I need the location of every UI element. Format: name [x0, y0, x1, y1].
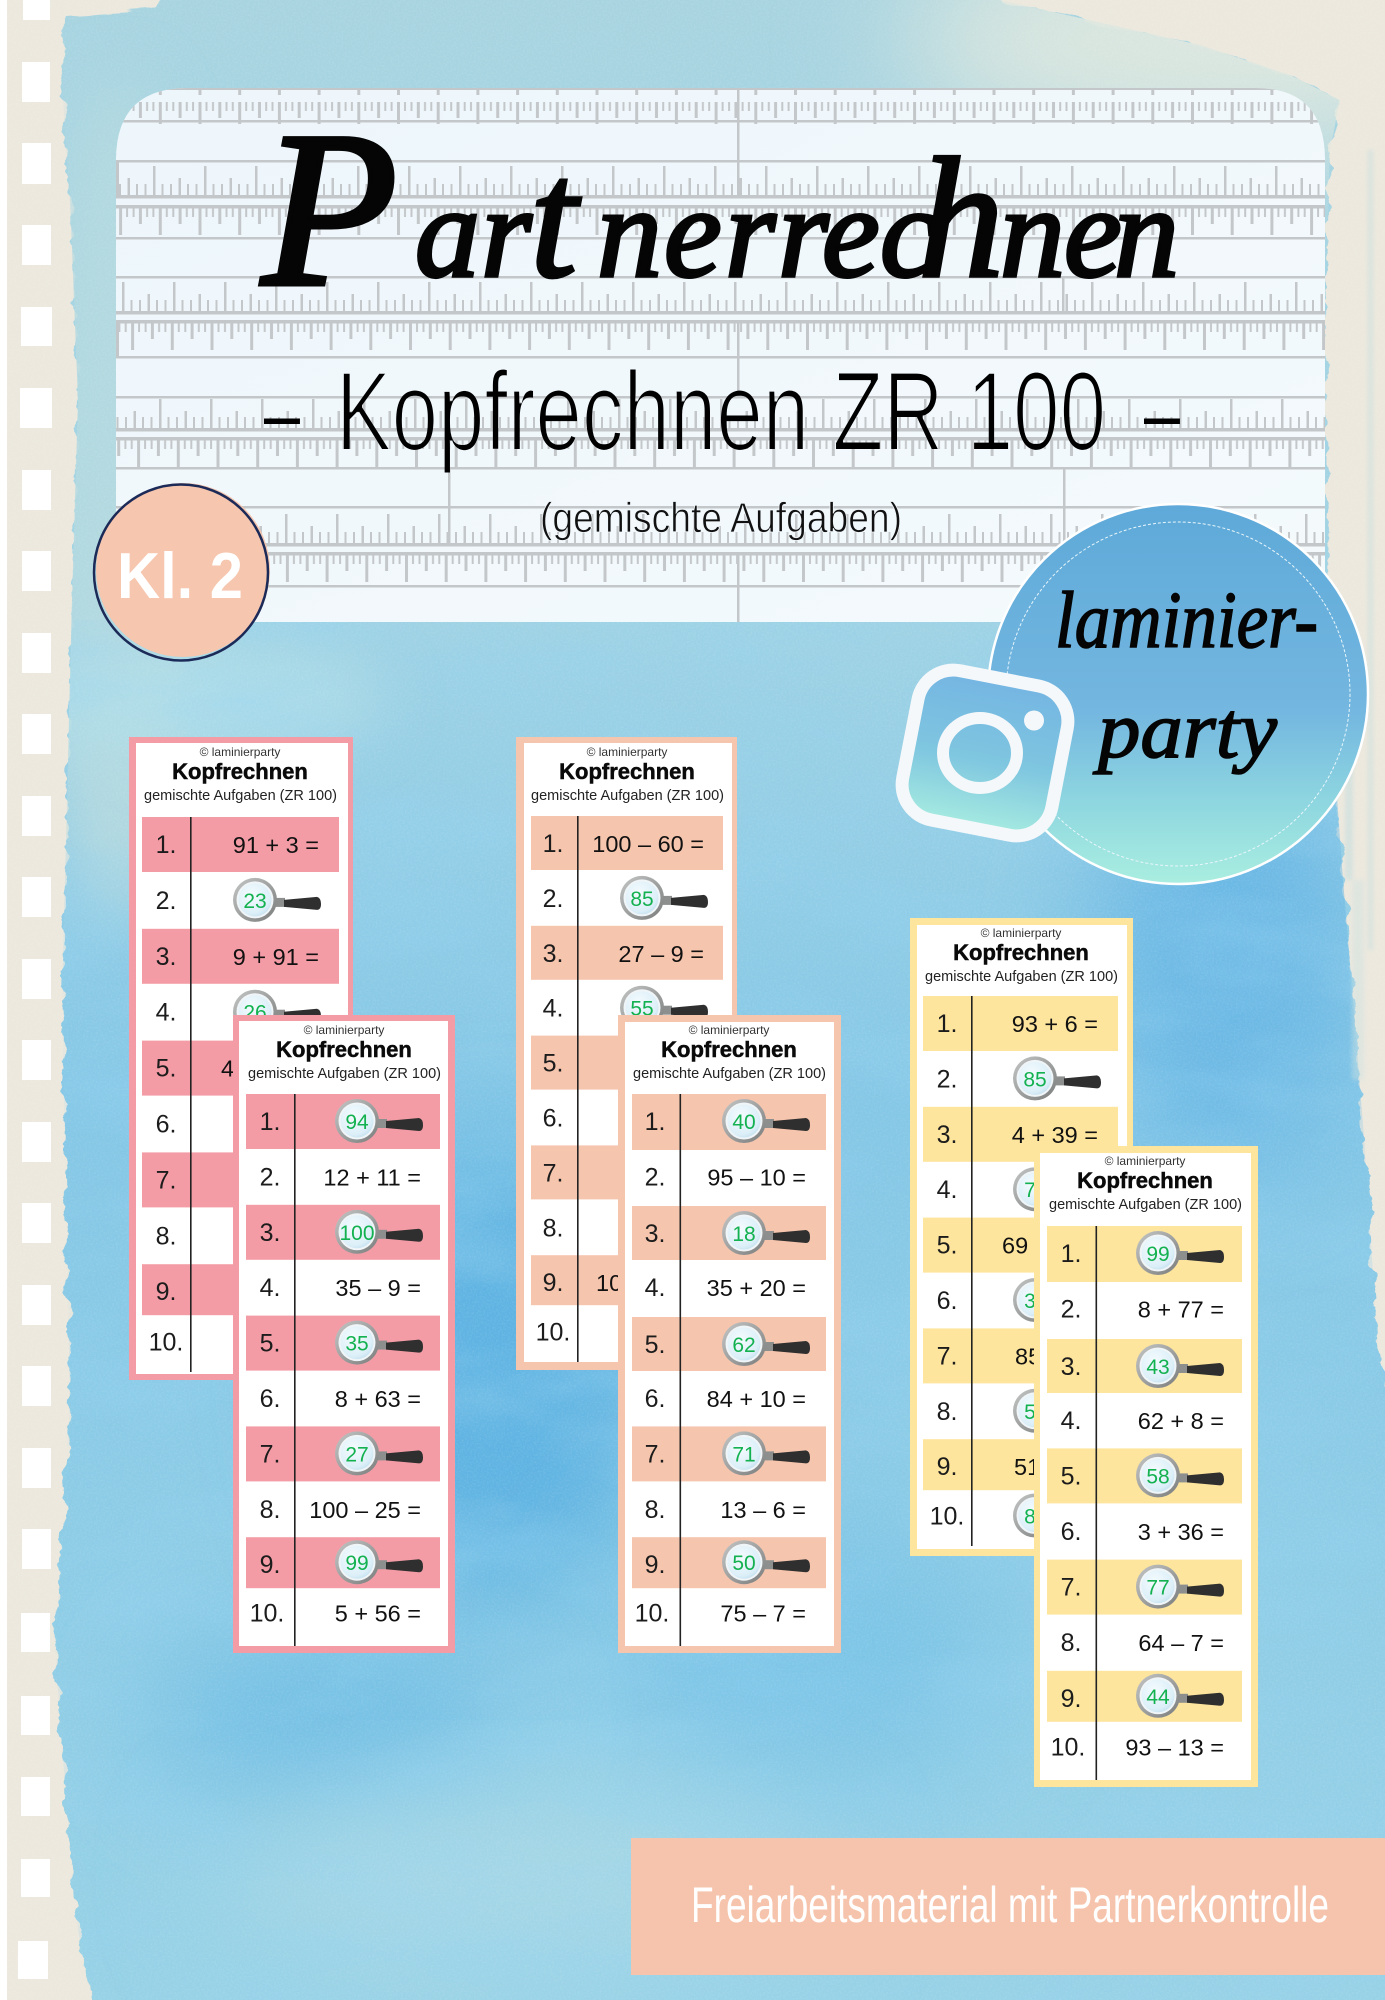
title: Partnerrechnen: r — [778, 161, 829, 305]
card: yellow front: 43 — [1146, 1356, 1170, 1379]
card: yellow front: 8. — [1061, 1629, 1081, 1657]
title: Partnerrechnen: P — [260, 87, 398, 333]
card: pink front: 3. — [260, 1219, 280, 1247]
card: peach front: 71 — [732, 1443, 756, 1466]
card: yellow back: 2. — [937, 1065, 957, 1093]
card: yellow front: 8 + 77 = — [1138, 1297, 1224, 1323]
icon: instagram — [896, 664, 1074, 842]
card: yellow back: 8 — [1024, 1506, 1036, 1528]
card: pink back: 6. — [156, 1110, 176, 1138]
card: pink back: 26 — [243, 1002, 267, 1025]
title: Partnerrechnen: h — [918, 124, 1004, 314]
title: Partnerrechnen — [260, 87, 1179, 333]
title: Partnerrechnen: e — [664, 161, 722, 305]
card: peach back: 6. — [543, 1104, 563, 1132]
card: yellow front: 93 – 13 = — [1125, 1734, 1224, 1760]
card: yellow front — [1034, 1146, 1258, 1787]
title: Partnerrechnen: r — [725, 161, 776, 305]
card: pink back: 91 + 3 = — [233, 832, 319, 858]
card: peach front: 7. — [645, 1440, 665, 1468]
card: yellow front: 44 — [1146, 1686, 1170, 1709]
title: Partnerrechnen: e — [822, 161, 880, 305]
card: yellow front: 9. — [1061, 1685, 1081, 1713]
card: peach front: 9. — [645, 1551, 665, 1579]
sticker: laminierparty: party — [1093, 687, 1278, 775]
card: pink back: 7. — [156, 1166, 176, 1194]
card: peach back: 8. — [543, 1214, 563, 1242]
card: yellow back: 6. — [937, 1287, 957, 1315]
card: pink back: 9. — [156, 1278, 176, 1306]
title: Partnerrechnen: n — [1114, 161, 1179, 305]
card: yellow front: 7. — [1061, 1574, 1081, 1602]
card: pink back: 10. — [149, 1328, 183, 1356]
card: pink front: 100 — [339, 1222, 375, 1245]
card: peach front: 75 – 7 = — [720, 1600, 806, 1626]
title: Partnerrechnen: r — [481, 161, 532, 305]
card: pink front: 4. — [260, 1274, 280, 1302]
title: Partnerrechnen: c — [880, 161, 938, 305]
card: peach back: 10 — [596, 1270, 622, 1296]
card: yellow front: 99 — [1146, 1243, 1170, 1266]
card: pink front: 35 – 9 = — [335, 1275, 421, 1301]
card: peach back — [516, 737, 737, 1370]
card: peach back: 1. — [543, 830, 563, 858]
card: peach front — [618, 1015, 841, 1653]
card: peach front: 40 — [732, 1111, 756, 1134]
ruler title panel — [116, 87, 1325, 622]
card: peach back: 2. — [543, 885, 563, 913]
card: pink back — [129, 737, 353, 1380]
card: peach front: 1. — [645, 1108, 665, 1136]
card: pink back: 4. — [156, 999, 176, 1027]
punched holes of the torn paper — [18, 0, 52, 1979]
paper streaks at the right edge — [1345, 150, 1373, 1080]
card: pink front: 8 + 63 = — [335, 1386, 421, 1412]
card: yellow back: 9. — [937, 1453, 957, 1481]
badge: Kl. 2 — [94, 483, 270, 660]
title: Partnerrechnen: a — [415, 161, 480, 305]
card: yellow front: 6. — [1061, 1518, 1081, 1546]
card: peach back: 100 – 60 = — [592, 831, 704, 857]
card: yellow back: 3. — [937, 1121, 957, 1149]
card: peach front: 10. — [635, 1600, 669, 1628]
card: peach front: 2. — [645, 1163, 665, 1191]
card: pink front: 35 — [345, 1333, 369, 1356]
white margin left of the torn paper — [0, 0, 7, 2000]
card: yellow back: 69 — [1002, 1233, 1028, 1259]
card: yellow front: 10. — [1051, 1734, 1085, 1762]
card: yellow back: 8. — [937, 1398, 957, 1426]
card: peach front: 13 – 6 = — [720, 1497, 806, 1523]
card: peach front: 3. — [645, 1220, 665, 1248]
card: yellow front: 3 + 36 = — [1138, 1519, 1224, 1545]
card: yellow front: 5. — [1061, 1462, 1081, 1490]
card: pink front: 27 — [345, 1443, 369, 1466]
card: pink front: 8. — [260, 1496, 280, 1524]
card: yellow back: 5 — [1024, 1401, 1036, 1424]
card: yellow back: 51 — [1014, 1454, 1040, 1480]
card: pink back: 3. — [156, 943, 176, 971]
card: yellow front: 4. — [1061, 1407, 1081, 1435]
card: yellow front: 2. — [1061, 1296, 1081, 1324]
card: yellow front: 58 — [1146, 1465, 1170, 1488]
card: yellow back: 3 — [1024, 1290, 1036, 1313]
card: yellow back: 7. — [937, 1342, 957, 1370]
card: pink front: 2. — [260, 1163, 280, 1191]
card: pink front: 9. — [260, 1551, 280, 1579]
card: yellow back: 7 — [1024, 1179, 1036, 1202]
card: peach back: 5. — [543, 1050, 563, 1078]
card: peach back: 10. — [536, 1318, 570, 1346]
card: pink front: 7. — [260, 1440, 280, 1468]
title: Partnerrechnen: n — [1000, 161, 1065, 305]
card: pink back: 1. — [156, 831, 176, 859]
card: yellow back: 10. — [930, 1502, 964, 1530]
card: peach back: 7. — [543, 1159, 563, 1187]
card: peach front: 95 – 10 = — [707, 1164, 806, 1190]
card: pink front: 5 + 56 = — [335, 1600, 421, 1626]
card: yellow back: 5. — [937, 1232, 957, 1260]
card: peach back: 27 – 9 = — [618, 941, 704, 967]
card: peach back: 9. — [543, 1269, 563, 1297]
card: peach back: 85 — [630, 888, 654, 911]
card: pink front: 6. — [260, 1385, 280, 1413]
card: peach front: 62 — [732, 1334, 756, 1357]
card: yellow back: 1. — [937, 1010, 957, 1038]
card: pink front: 10. — [250, 1600, 284, 1628]
card: peach back: 3. — [543, 940, 563, 968]
card: yellow front: 64 – 7 = — [1138, 1630, 1224, 1656]
card: pink back: 9 + 91 = — [233, 944, 319, 970]
card: pink front: 5. — [260, 1330, 280, 1358]
card: pink front: 12 + 11 = — [323, 1164, 421, 1190]
card: peach front: 18 — [732, 1223, 756, 1246]
title: Partnerrechnen: n — [597, 161, 662, 305]
card: pink front: 94 — [345, 1111, 369, 1134]
card: peach front: 50 — [732, 1552, 756, 1575]
sticker: laminierparty — [988, 504, 1368, 884]
card: pink front: 99 — [345, 1552, 369, 1575]
card: peach front: 5. — [645, 1331, 665, 1359]
card: peach front: 35 + 20 = — [707, 1275, 806, 1301]
subtitle: Kopfrechnen ZR 100: Kopfrechnen ZR 100 — [336, 349, 1106, 474]
subtitle: Kopfrechnen ZR 100: – — [1143, 349, 1181, 474]
card: peach front: 8. — [645, 1496, 665, 1524]
card: pink front: 100 – 25 = — [309, 1497, 421, 1523]
title: Partnerrechnen: t — [530, 125, 581, 313]
card: pink back: 4 — [221, 1056, 234, 1082]
card: pink back: 5. — [156, 1055, 176, 1083]
caption: gemischte Aufgaben: (gemischte Aufgaben) — [540, 494, 902, 541]
card: pink front: 1. — [260, 1108, 280, 1136]
card: pink front — [233, 1015, 455, 1653]
card: yellow back: 4. — [937, 1176, 957, 1204]
card: yellow back: 93 + 6 = — [1012, 1011, 1098, 1037]
card: pink back: 23 — [243, 890, 267, 913]
sticker: laminierparty: laminier- — [1055, 577, 1318, 665]
card: yellow front: 3. — [1061, 1353, 1081, 1381]
title: Partnerrechnen: e — [1064, 161, 1122, 305]
card: yellow back: 85 — [1023, 1068, 1047, 1091]
card: yellow front: 62 + 8 = — [1138, 1408, 1224, 1434]
card: yellow back: 85 — [1015, 1343, 1041, 1369]
card: peach front: 84 + 10 = — [707, 1386, 806, 1412]
card: yellow back — [910, 918, 1133, 1556]
card: pink back: 2. — [156, 887, 176, 915]
card: peach front: 4. — [645, 1274, 665, 1302]
card: peach back: 55 — [630, 998, 654, 1021]
card: pink back: 8. — [156, 1222, 176, 1250]
card: yellow back: 4 + 39 = — [1012, 1122, 1098, 1148]
badge: Kl. 2: Kl. 2 — [117, 539, 243, 612]
card: peach back: 4. — [543, 995, 563, 1023]
card: peach front: 6. — [645, 1385, 665, 1413]
card: yellow front: 77 — [1146, 1577, 1170, 1600]
subtitle: Kopfrechnen ZR 100: – — [263, 349, 301, 474]
banner: Freiarbeitsmaterial — [631, 1838, 1385, 1975]
card: yellow front: 1. — [1061, 1240, 1081, 1268]
